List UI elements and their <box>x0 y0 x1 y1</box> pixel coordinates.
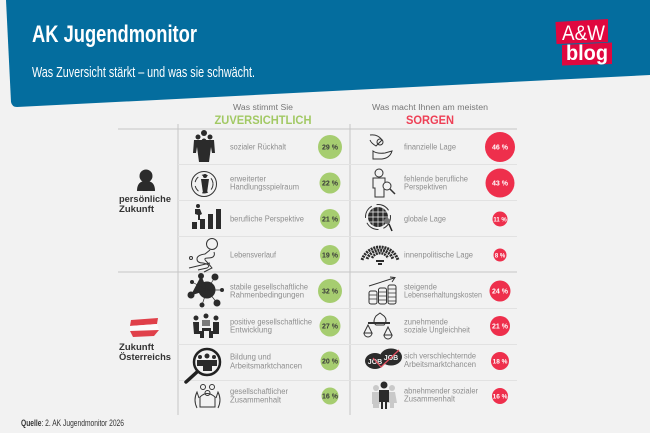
row: sozialer Rückhalt: sozialer Rückhalt <box>230 142 287 152</box>
row: berufliche Perspektive <box>192 204 340 229</box>
row: globale Lage: globale Lage <box>404 214 446 224</box>
row: erweiterter Handlungsspielraum: erweiterter <box>230 174 266 184</box>
row: gesellschaftlicher Zusammenhalt: Zusammenhalt <box>230 396 282 404</box>
row: innenpolitische Lage: innenpolitische Lage <box>404 250 474 260</box>
icon: people at table <box>193 314 219 338</box>
row: Lebensverlauf: 19 % <box>322 252 339 260</box>
row: Lebensverlauf: Lebensverlauf <box>230 250 277 260</box>
logo: A&W blog: blog <box>566 42 608 65</box>
row: sich verschlechternde Arbeitsmarktchancen <box>365 348 509 370</box>
header banner <box>6 0 650 107</box>
label: Zukunft Österreichs <box>119 342 171 363</box>
row: zunehmende soziale Ungleichheit: soziale Ungleichheit <box>404 326 471 334</box>
row: sozialer Rückhalt: 29 % <box>322 144 339 152</box>
row: stabile Rahmenbedingungen: 32 % <box>322 288 339 296</box>
row: Lebensverlauf <box>189 238 340 272</box>
subtitle: Was Zuversicht stärkt – und was sie schwächt. <box>32 65 255 81</box>
icon: career steps <box>192 204 221 229</box>
row: abnehmender sozialer Zusammenhalt <box>372 382 508 409</box>
logo: A&W blog <box>556 19 612 66</box>
row: positive Entwicklung: 27 % <box>322 324 339 330</box>
label: Zukunft Österreichs: Österreichs <box>119 352 171 363</box>
column heading: Sorgen: Was macht Ihnen am meisten <box>372 103 488 112</box>
row: stabile Rahmenbedingungen <box>188 273 342 308</box>
icon: globe with magnifier <box>366 204 392 231</box>
column heading: Sorgen: SORGEN <box>406 113 454 127</box>
row: globale Lage: 11 % <box>493 218 507 224</box>
column heading: Zuversichtlich: ZUVERSICHTLICH <box>214 113 312 127</box>
row: steigende Lebenserhaltungskosten <box>369 277 510 304</box>
row: innenpolitische Lage <box>362 247 506 264</box>
row: gesellschaftlicher Zusammenhalt: 16 % <box>322 394 339 400</box>
row: Bildung und Arbeitsmarktchancen: Arbeitsmarktchancen <box>230 362 302 370</box>
row: positive Entwicklung: positive gesellschaftliche <box>230 318 313 326</box>
row: erweiterter Handlungsspielraum: 22 % <box>322 180 339 188</box>
title: AK Jugendmonitor <box>32 21 197 48</box>
source note: Quelle: 2. AK Jugendmonitor 2026 <box>21 418 124 428</box>
icon: job bubbles crossed out: JOB <box>384 355 398 362</box>
icon: network hub <box>188 273 224 308</box>
icon: magnifier over people <box>186 349 220 382</box>
row: fehlende berufliche Perspektiven: fehlende berufliche <box>404 174 469 184</box>
row: fehlende berufliche Perspektiven: Perspektiven <box>404 182 447 192</box>
row: steigende Lebenserhaltungskosten: steigende <box>404 282 438 292</box>
label: persönliche Zukunft: Zukunft <box>119 204 155 215</box>
column heading: Sorgen <box>372 103 488 127</box>
row: stabile Rahmenbedingungen: Rahmenbedingungen <box>230 290 304 300</box>
row: erweiterter Handlungsspielraum: Handlungsspielraum <box>230 182 299 192</box>
icon: separated people <box>372 382 397 409</box>
row: gesellschaftlicher Zusammenhalt <box>195 384 339 408</box>
icon: person with magnifier <box>373 169 395 197</box>
icon: hands around people <box>195 384 220 408</box>
logo: A&W blog: A&W <box>562 22 605 45</box>
row: abnehmender sozialer Zusammenhalt: Zusammenhalt <box>404 394 456 404</box>
row: stabile Rahmenbedingungen: stabile gesellschaftliche <box>230 282 309 292</box>
row: positive Entwicklung <box>193 314 340 338</box>
icon: scales with money <box>364 313 392 339</box>
row: zunehmende soziale Ungleichheit <box>364 313 510 339</box>
label: persönliche Zukunft: persönliche <box>119 194 171 205</box>
row: positive Entwicklung: Entwicklung <box>230 326 272 334</box>
row: sozialer Rückhalt <box>193 130 342 162</box>
row: berufliche Perspektive: 21 % <box>322 216 339 224</box>
icon: winding road <box>189 238 218 272</box>
icon: Austrian flag <box>130 318 159 337</box>
icon: hands with coin <box>370 135 392 159</box>
icon: parliament seating <box>362 247 398 264</box>
row: sich verschlechternde Arbeitsmarktchancen: Arbeitsmarktchancen <box>404 360 476 369</box>
icon: person in circles <box>192 172 216 196</box>
row: fehlende berufliche Perspektiven <box>373 168 514 198</box>
row: berufliche Perspektive: berufliche Perspektive <box>230 214 305 224</box>
row: erweiterter Handlungsspielraum <box>192 172 340 196</box>
row: abnehmender sozialer Zusammenhalt: 16 % <box>493 394 508 400</box>
row: gesellschaftlicher Zusammenhalt: gesellschaftlicher <box>230 387 288 396</box>
row: fehlende berufliche Perspektiven: 43 % <box>492 180 509 188</box>
icon: group of people <box>193 130 215 162</box>
column heading: Zuversichtlich: Was stimmt Sie <box>233 103 294 112</box>
icon: job bubbles crossed out <box>365 348 402 369</box>
row: finanzielle Lage: finanzielle Lage <box>404 142 457 152</box>
icon: job bubbles crossed out: JOB <box>368 359 382 366</box>
icon: person <box>137 170 155 191</box>
label: persönliche Zukunft <box>119 194 171 215</box>
column heading: Zuversichtlich <box>214 103 312 127</box>
row: globale Lage <box>366 204 508 231</box>
row: Bildung und Arbeitsmarktchancen: 20 % <box>322 358 339 366</box>
row: finanzielle Lage: 46 % <box>492 144 509 152</box>
row: finanzielle Lage <box>370 132 515 162</box>
row: steigende Lebenserhaltungskosten: 24 % <box>492 288 509 296</box>
row: Bildung und Arbeitsmarktchancen: Bildung und <box>230 352 271 362</box>
row: Bildung und Arbeitsmarktchancen <box>186 349 340 382</box>
label: Zukunft Österreichs: Zukunft <box>119 342 155 353</box>
row: abnehmender sozialer Zusammenhalt: abnehmender sozialer <box>404 386 478 396</box>
row: zunehmende soziale Ungleichheit: 21 % <box>492 324 509 330</box>
row: zunehmende soziale Ungleichheit: zunehmende <box>404 318 449 326</box>
row: sich verschlechternde Arbeitsmarktchancen: 18 % <box>493 358 508 366</box>
row: steigende Lebenserhaltungskosten: Lebenserhaltungskosten <box>404 290 482 300</box>
row: sich verschlechternde Arbeitsmarktchancen: sich verschlechternde <box>404 352 477 360</box>
row: innenpolitische Lage: 8 % <box>495 254 506 260</box>
icon: coin stacks with arrow <box>369 277 396 304</box>
